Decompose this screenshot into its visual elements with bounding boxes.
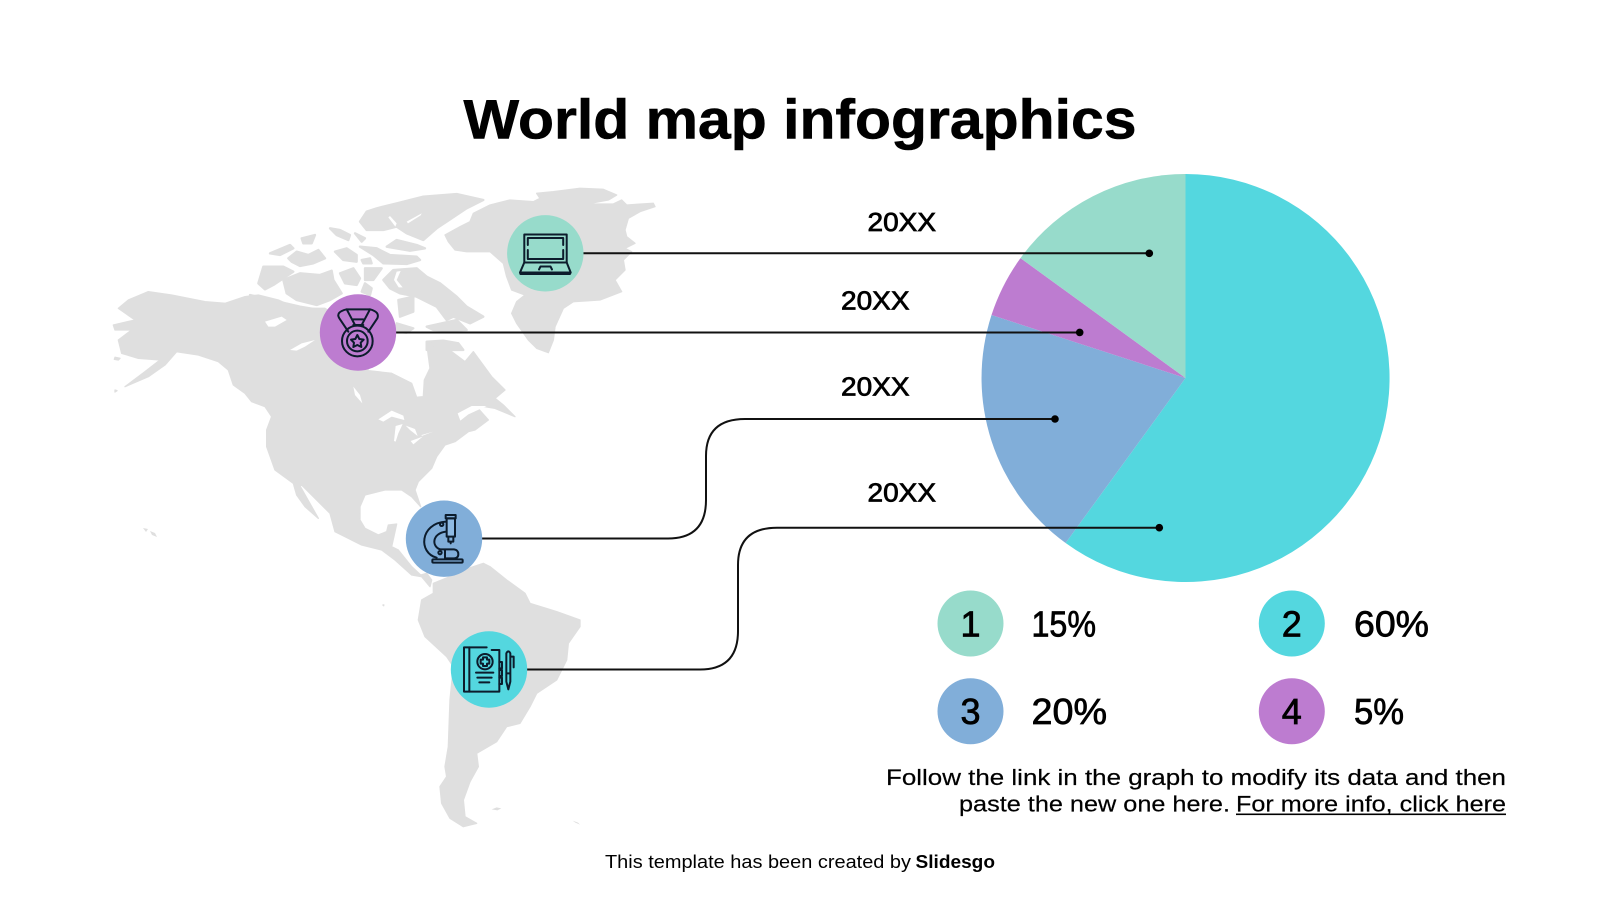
legend item 1: 1 xyxy=(960,604,981,645)
note text: For more info, click here xyxy=(1236,792,1506,817)
legend item 3 xyxy=(938,678,1107,744)
year label 1: 20XX xyxy=(868,207,936,237)
world map: the Americas xyxy=(113,188,655,827)
connector: laptop to green slice xyxy=(583,250,1153,257)
note text xyxy=(886,765,1506,817)
map: Hawaii xyxy=(143,528,157,537)
legend item 3: 3 xyxy=(960,691,981,732)
footer credit: This template has been created by xyxy=(605,851,912,872)
pie slice: 20% blue xyxy=(982,315,1186,543)
legend item 2 xyxy=(1259,590,1429,656)
note text: paste the new one here. xyxy=(959,792,1230,817)
year label 2: 20XX xyxy=(841,285,910,315)
pie chart xyxy=(982,174,1390,582)
marker: medal icon xyxy=(320,294,396,371)
year label 3: 20XX xyxy=(841,372,910,402)
legend item 4 xyxy=(1259,678,1404,744)
connector: notebook to teal slice xyxy=(527,524,1163,670)
footer credit: Slidesgo xyxy=(916,851,995,872)
legend item 1 xyxy=(938,590,1096,656)
pie slice: 60% teal xyxy=(1066,174,1390,582)
legend item 4: 4 xyxy=(1282,691,1302,732)
map: Greenland xyxy=(445,188,655,353)
year label 4: 20XX xyxy=(868,478,936,508)
legend item 1: 15% xyxy=(1032,604,1096,645)
map: North and Central America xyxy=(113,292,515,587)
marker: microscope icon xyxy=(406,500,482,577)
marker: medical notebook icon xyxy=(451,631,527,708)
note text: Follow the link in the graph to modify its data and then xyxy=(886,765,1506,790)
map: Arctic islands xyxy=(250,194,483,350)
marker: laptop icon xyxy=(507,215,584,292)
legend item 4: 5% xyxy=(1354,691,1404,732)
pie slice: 5% purple xyxy=(992,258,1186,378)
legend item 2: 60% xyxy=(1354,604,1429,645)
connector: medal to purple slice xyxy=(396,329,1083,336)
title: World map infographics xyxy=(464,88,1136,150)
legend item 2: 2 xyxy=(1282,604,1302,645)
map: South America xyxy=(382,563,580,827)
legend xyxy=(938,590,1429,744)
legend item 3: 20% xyxy=(1032,691,1107,732)
pie slice: 15% green xyxy=(1020,174,1186,378)
connector: microscope to blue slice xyxy=(482,415,1059,538)
